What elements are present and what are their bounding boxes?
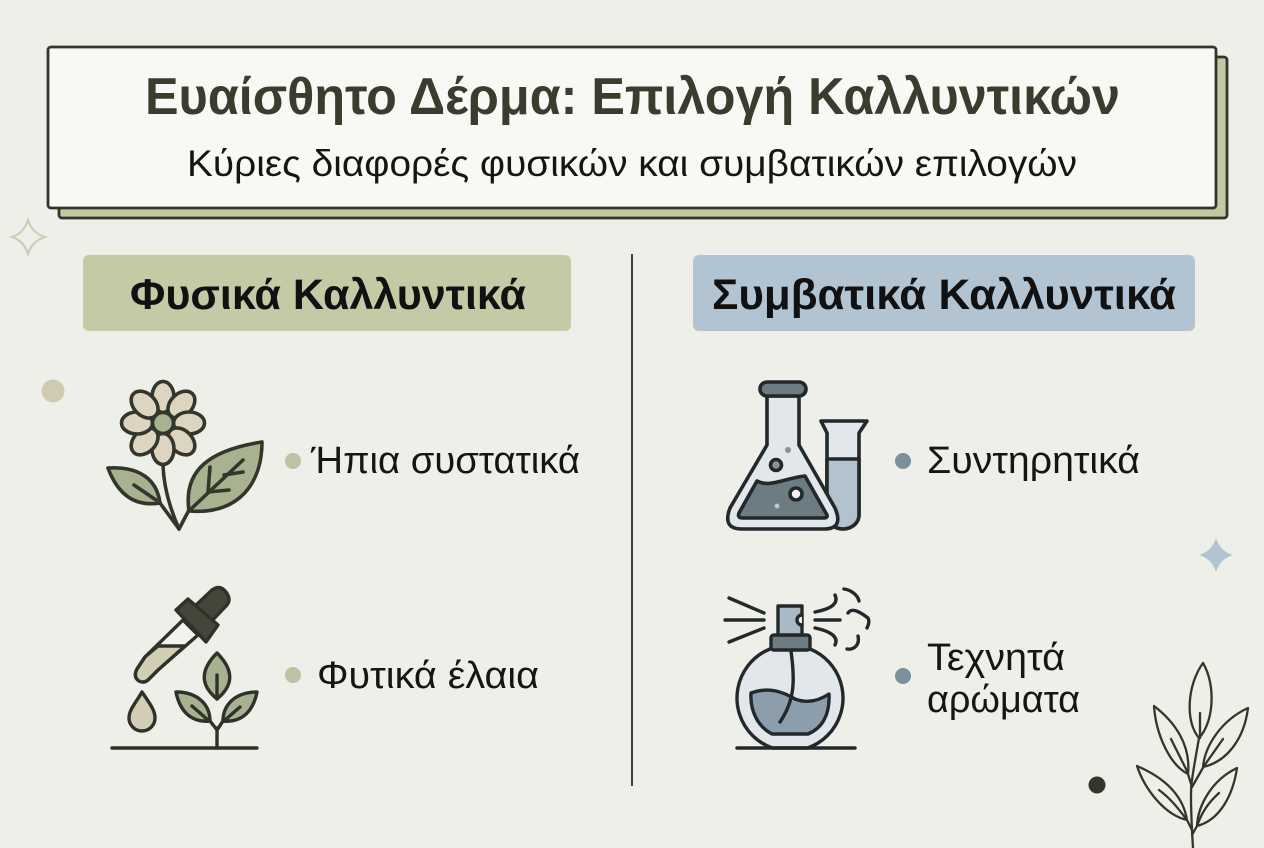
bullet: preservatives: Συντηρητικά (927, 440, 1140, 482)
bullet: artificial fragrances (895, 637, 1080, 721)
panel: conventional cosmetics heading (693, 255, 1195, 331)
decorative plant outline (1137, 663, 1248, 848)
panel: conventional cosmetics heading: Συμβατικά Καλλυντικά (712, 271, 1176, 319)
icon: flower with leaves (108, 382, 262, 529)
decorative dot dark (1088, 776, 1106, 794)
decorative sparkle outline (12, 220, 45, 254)
title: Ευαίσθητο Δέρμα: Επιλογή Καλλυντικών (145, 68, 1120, 126)
subtitle: Κύριες διαφορές φυσικών και συμβατικών επιλογών (187, 143, 1077, 184)
icon: perfume bottle (725, 589, 869, 748)
decorative sparkle blue (1199, 538, 1233, 572)
bullet: mild ingredients: Ήπια συστατικά (310, 440, 580, 482)
decorative dot tan (42, 380, 64, 402)
center divider (631, 254, 633, 786)
bullet: plant oils: Φυτικά έλαια (317, 655, 539, 697)
icon: dropper and plant (112, 587, 257, 748)
panel: natural cosmetics heading (83, 255, 571, 331)
bullet: artificial fragrances: Τεχνητά (927, 637, 1065, 679)
bullet: artificial fragrances: αρώματα (927, 679, 1080, 721)
icon: flask and test tube (728, 382, 867, 529)
title banner (48, 47, 1227, 218)
panel: natural cosmetics heading: Φυσικά Καλλυντικά (130, 271, 526, 319)
